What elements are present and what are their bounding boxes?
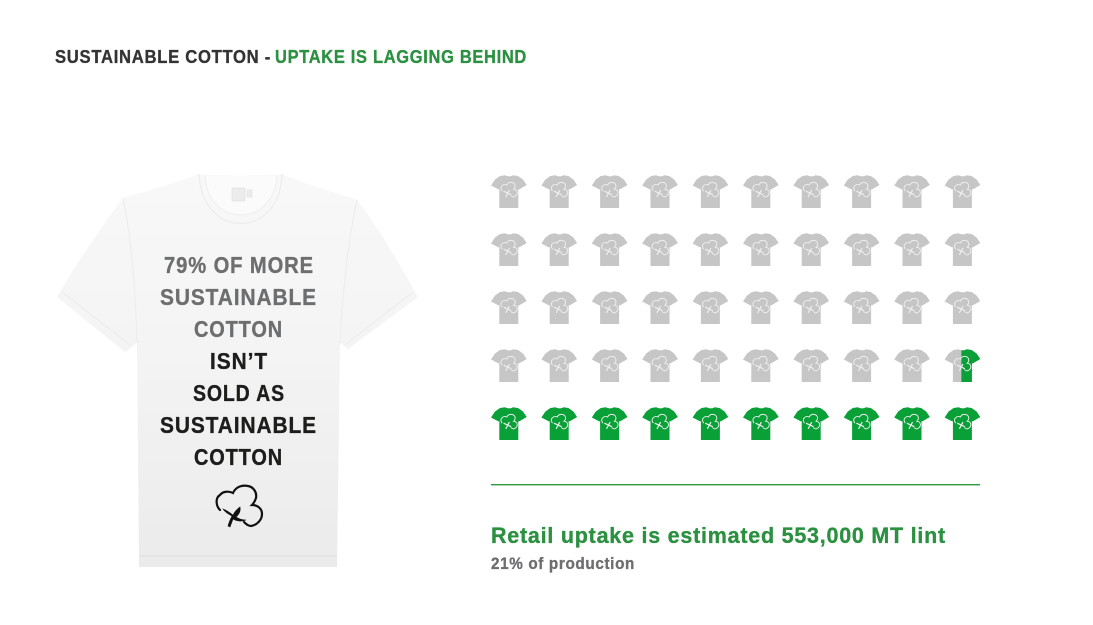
sub statistic: 21% of production bbox=[491, 555, 635, 573]
pictogram grid of t-shirts bbox=[491, 175, 980, 440]
row 5: green bbox=[491, 407, 980, 440]
t-shirt illustration with message bbox=[57, 174, 418, 567]
row 3: grey bbox=[491, 291, 980, 324]
title bbox=[55, 46, 527, 67]
message: black lines: ISN’T bbox=[210, 348, 268, 374]
message: black lines bbox=[160, 348, 317, 470]
shirt body bbox=[57, 174, 418, 567]
row 1: grey bbox=[491, 175, 980, 208]
message: black lines: SUSTAINABLE bbox=[160, 412, 317, 438]
message: black lines: SOLD AS bbox=[193, 380, 285, 406]
row 2: grey bbox=[491, 233, 980, 266]
title: SUSTAINABLE COTTON - bbox=[55, 46, 271, 67]
collar bbox=[199, 174, 282, 224]
message: grey lines: COTTON bbox=[194, 316, 283, 342]
message: black lines: COTTON bbox=[194, 444, 283, 470]
row 4: grey with one part-green shirt bbox=[491, 349, 980, 382]
message: grey lines bbox=[160, 252, 317, 342]
message: grey lines: SUSTAINABLE bbox=[160, 284, 317, 310]
headline statistic: Retail uptake is estimated 553,000 MT lint bbox=[491, 523, 946, 548]
icon: cotton boll bbox=[217, 486, 262, 527]
shirt seams and hem bbox=[62, 198, 413, 556]
message: grey lines: 79% OF MORE bbox=[164, 252, 314, 278]
neck label bbox=[232, 188, 252, 201]
title: UPTAKE IS LAGGING BEHIND bbox=[275, 46, 527, 67]
